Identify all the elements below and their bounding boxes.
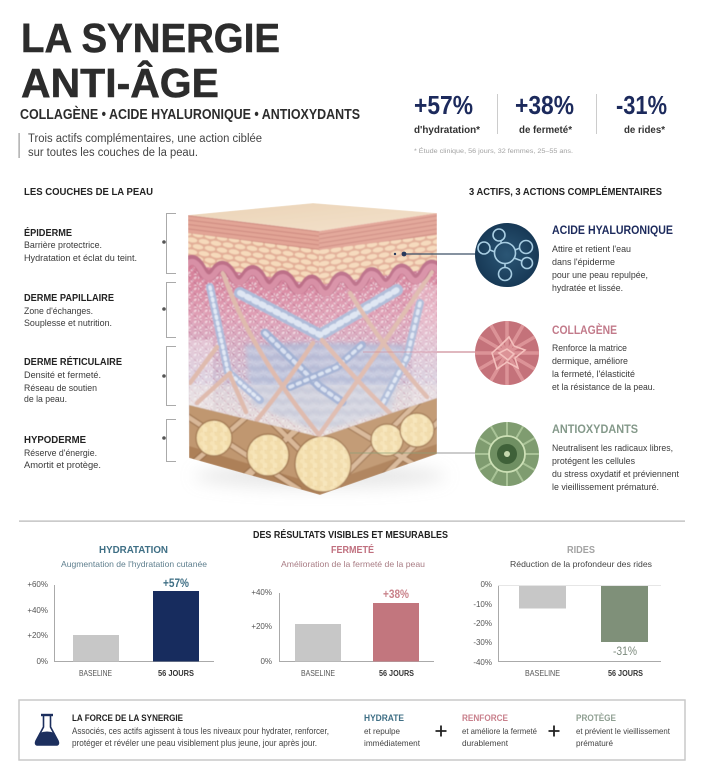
active: collagen: la fermeté, l'élasticité bbox=[552, 369, 635, 379]
active: collagen: et la résistance de la peau. bbox=[552, 382, 655, 392]
benefit: hydrate: HYDRATE bbox=[364, 713, 404, 724]
label: derme réticulaire: DERME RÉTICULAIRE bbox=[24, 355, 122, 368]
intro text bbox=[18, 133, 262, 159]
benefit: protects: et prévient le vieillissement bbox=[576, 726, 671, 736]
header: title: ANTI-ÂGE bbox=[21, 60, 219, 106]
chart: wrinkles: -20% bbox=[473, 619, 492, 628]
label: derme réticulaire: Densité et fermeté. bbox=[24, 370, 101, 380]
label: épiderme: Hydratation et éclat du teint. bbox=[24, 253, 137, 263]
chart: hydration: +20% bbox=[27, 631, 48, 640]
chart: hydration: HYDRATATION bbox=[99, 544, 168, 556]
label: derme papillaire: DERME PAPILLAIRE bbox=[24, 293, 114, 304]
chart: wrinkles: BASELINE bbox=[525, 669, 560, 678]
study footnote: * Étude clinique, 56 jours, 32 femmes, 25–55 ans. bbox=[414, 146, 573, 155]
label: épiderme: ÉPIDERME bbox=[24, 226, 72, 239]
layer labels bbox=[24, 226, 137, 470]
benefit: strengthens bbox=[462, 713, 537, 748]
label: derme papillaire bbox=[24, 293, 114, 328]
benefit: hydrate: et repulpe bbox=[364, 726, 400, 736]
connector: collagen bbox=[363, 351, 476, 353]
chart: firmness: +40% bbox=[251, 588, 272, 597]
synergy panel bbox=[19, 700, 685, 760]
active: antioxidants: ANTIOXYDANTS bbox=[552, 422, 638, 436]
chart: hydration: +40% bbox=[27, 606, 48, 615]
stat: wrinkles bbox=[616, 92, 667, 136]
subtitle: COLLAGÈNE • ACIDE HYALURONIQUE • ANTIOXYDANTS bbox=[20, 106, 360, 123]
intro text: Trois actifs complémentaires, une action ciblée bbox=[28, 133, 262, 145]
benefit: strengthens: et améliore la fermeté bbox=[462, 726, 537, 736]
intro text: sur toutes les couches de la peau. bbox=[28, 147, 198, 159]
stat: firmness bbox=[515, 92, 574, 136]
label: derme réticulaire bbox=[24, 355, 122, 404]
synergy description: LA FORCE DE LA SYNERGIE bbox=[72, 713, 183, 724]
stat: hydration: +57% bbox=[414, 92, 473, 120]
stat: firmness: de fermeté* bbox=[519, 125, 572, 136]
active: hyaluronic acid: dans l'épiderme bbox=[552, 257, 615, 267]
stat: hydration: d'hydratation* bbox=[414, 125, 480, 136]
stat: firmness: +38% bbox=[515, 92, 574, 120]
label: hypoderme: Réserve d'énergie. bbox=[24, 448, 97, 458]
active: hyaluronic acid: Attire et retient l'eau bbox=[552, 244, 631, 254]
active: collagen: Renforce la matrice bbox=[552, 343, 627, 353]
chart: wrinkles: 56 JOURS bbox=[608, 669, 644, 678]
synergy description bbox=[72, 713, 329, 748]
stratum corneum bbox=[188, 213, 437, 251]
synergy description: protéger et révéler une peau visiblement plus jeune, jour après jour. bbox=[72, 738, 317, 748]
active: hyaluronic acid: pour une peau repulpée, bbox=[552, 270, 648, 280]
chart: wrinkles bbox=[473, 544, 661, 678]
label: épiderme: Barrière protectrice. bbox=[24, 240, 102, 250]
label: hypoderme bbox=[24, 435, 101, 470]
chart: hydration bbox=[27, 544, 214, 678]
bar: 56 days bbox=[153, 591, 199, 662]
skin cross-section illustration bbox=[185, 203, 445, 498]
benefit: hydrate: immédiatement bbox=[364, 738, 421, 748]
hyaluronic acid chains bbox=[210, 287, 420, 403]
bar: baseline bbox=[295, 624, 341, 662]
plus sign bbox=[436, 726, 446, 736]
chart: firmness: FERMETÉ bbox=[331, 543, 374, 556]
stat: hydration bbox=[414, 92, 480, 136]
bar: 56 days bbox=[373, 603, 419, 662]
label: derme papillaire: Souplesse et nutrition. bbox=[24, 318, 112, 328]
label: hypoderme: Amortit et protège. bbox=[24, 460, 101, 470]
icon: antioxidant cell bbox=[475, 422, 539, 486]
label: hypoderme: HYPODERME bbox=[24, 435, 86, 446]
epidermis cells bbox=[188, 233, 437, 285]
fat lobules bbox=[196, 413, 434, 492]
chart: firmness bbox=[251, 543, 434, 678]
active: antioxidants bbox=[552, 422, 679, 492]
synergy description: Associés, ces actifs agissent à tous les niveaux pour hydrater, renforcer, bbox=[72, 726, 329, 736]
benefit: strengthens: durablement bbox=[462, 738, 509, 748]
active: collagen: COLLAGÈNE bbox=[552, 322, 617, 337]
chart: wrinkles: -31% bbox=[613, 646, 637, 658]
chart: wrinkles: -40% bbox=[473, 658, 492, 667]
layer brackets bbox=[162, 214, 176, 462]
chart: wrinkles: -10% bbox=[473, 600, 492, 609]
bar: 56 days bbox=[601, 586, 648, 642]
chart: hydration: +60% bbox=[27, 580, 48, 589]
stat: wrinkles: de rides* bbox=[624, 125, 665, 136]
chart: firmness: BASELINE bbox=[301, 669, 335, 678]
chart: firmness: +20% bbox=[251, 622, 272, 631]
stat: wrinkles: -31% bbox=[616, 92, 667, 120]
connector: hyaluronic acid bbox=[394, 252, 476, 256]
benefit: strengthens: RENFORCE bbox=[462, 713, 508, 724]
icon: hyaluronic acid molecule bbox=[475, 223, 539, 287]
label: épiderme bbox=[24, 226, 137, 263]
label: derme réticulaire: Réseau de soutien bbox=[24, 383, 97, 393]
collagen fibres bbox=[190, 270, 433, 435]
benefit: protects bbox=[576, 713, 671, 748]
hypodermis bbox=[185, 395, 440, 498]
chart: hydration: +57% bbox=[163, 578, 189, 590]
chart: firmness: 0% bbox=[260, 657, 272, 666]
chart: hydration: 0% bbox=[36, 657, 48, 666]
connector: antioxidants bbox=[350, 452, 476, 454]
active: collagen: dermique, améliore bbox=[552, 356, 628, 366]
benefit: protects: PROTÈGE bbox=[576, 713, 616, 724]
bar: baseline bbox=[73, 635, 119, 662]
active: hyaluronic acid bbox=[552, 223, 673, 293]
active: collagen bbox=[552, 322, 655, 392]
active: hyaluronic acid: ACIDE HYALURONIQUE bbox=[552, 223, 673, 237]
top surface bbox=[188, 203, 437, 231]
dermis layer bbox=[185, 255, 440, 445]
chart: hydration: Augmentation de l'hydratation cutanée bbox=[61, 559, 207, 569]
active: hyaluronic acid: hydratée et lissée. bbox=[552, 283, 623, 293]
section heading: actives: 3 ACTIFS, 3 ACTIONS COMPLÉMENTAIRES bbox=[469, 185, 662, 198]
label: derme réticulaire: de la peau. bbox=[24, 394, 67, 404]
active: antioxidants: le vieillissement prématuré. bbox=[552, 482, 659, 492]
active: antioxidants: du stress oxydatif et préviennent bbox=[552, 469, 679, 479]
active: antioxidants: Neutralisent les radicaux libres, bbox=[552, 443, 673, 453]
bar: baseline bbox=[519, 586, 566, 608]
chart: hydration: 56 JOURS bbox=[158, 669, 195, 678]
results heading: DES RÉSULTATS VISIBLES ET MESURABLES bbox=[253, 528, 448, 541]
chart: wrinkles: Réduction de la profondeur des rides bbox=[510, 559, 652, 569]
chart: firmness: +38% bbox=[383, 589, 409, 601]
header: title: LA SYNERGIE bbox=[21, 15, 280, 61]
active: antioxidants: protégent les cellules bbox=[552, 456, 635, 466]
dermal-epidermal wavy junction bbox=[186, 260, 439, 294]
chart: hydration: BASELINE bbox=[79, 669, 112, 678]
chart: wrinkles: RIDES bbox=[567, 544, 595, 556]
label: derme papillaire: Zone d'échanges. bbox=[24, 306, 93, 316]
key statistics bbox=[414, 92, 667, 136]
header: title bbox=[21, 15, 280, 106]
icon: flask bbox=[36, 715, 58, 745]
chart: firmness: Amélioration de la fermeté de la peau bbox=[281, 559, 425, 569]
section heading: layers: LES COUCHES DE LA PEAU bbox=[24, 187, 153, 198]
blue mesh zone bbox=[244, 340, 405, 430]
chart: firmness: 56 JOURS bbox=[379, 669, 415, 678]
benefit: protects: prématuré bbox=[576, 738, 613, 748]
chart: wrinkles: -30% bbox=[473, 638, 492, 647]
plus sign bbox=[548, 726, 560, 736]
icon: collagen fibres bbox=[475, 321, 539, 385]
benefit: hydrate bbox=[364, 713, 421, 748]
chart: wrinkles: 0% bbox=[480, 580, 492, 589]
